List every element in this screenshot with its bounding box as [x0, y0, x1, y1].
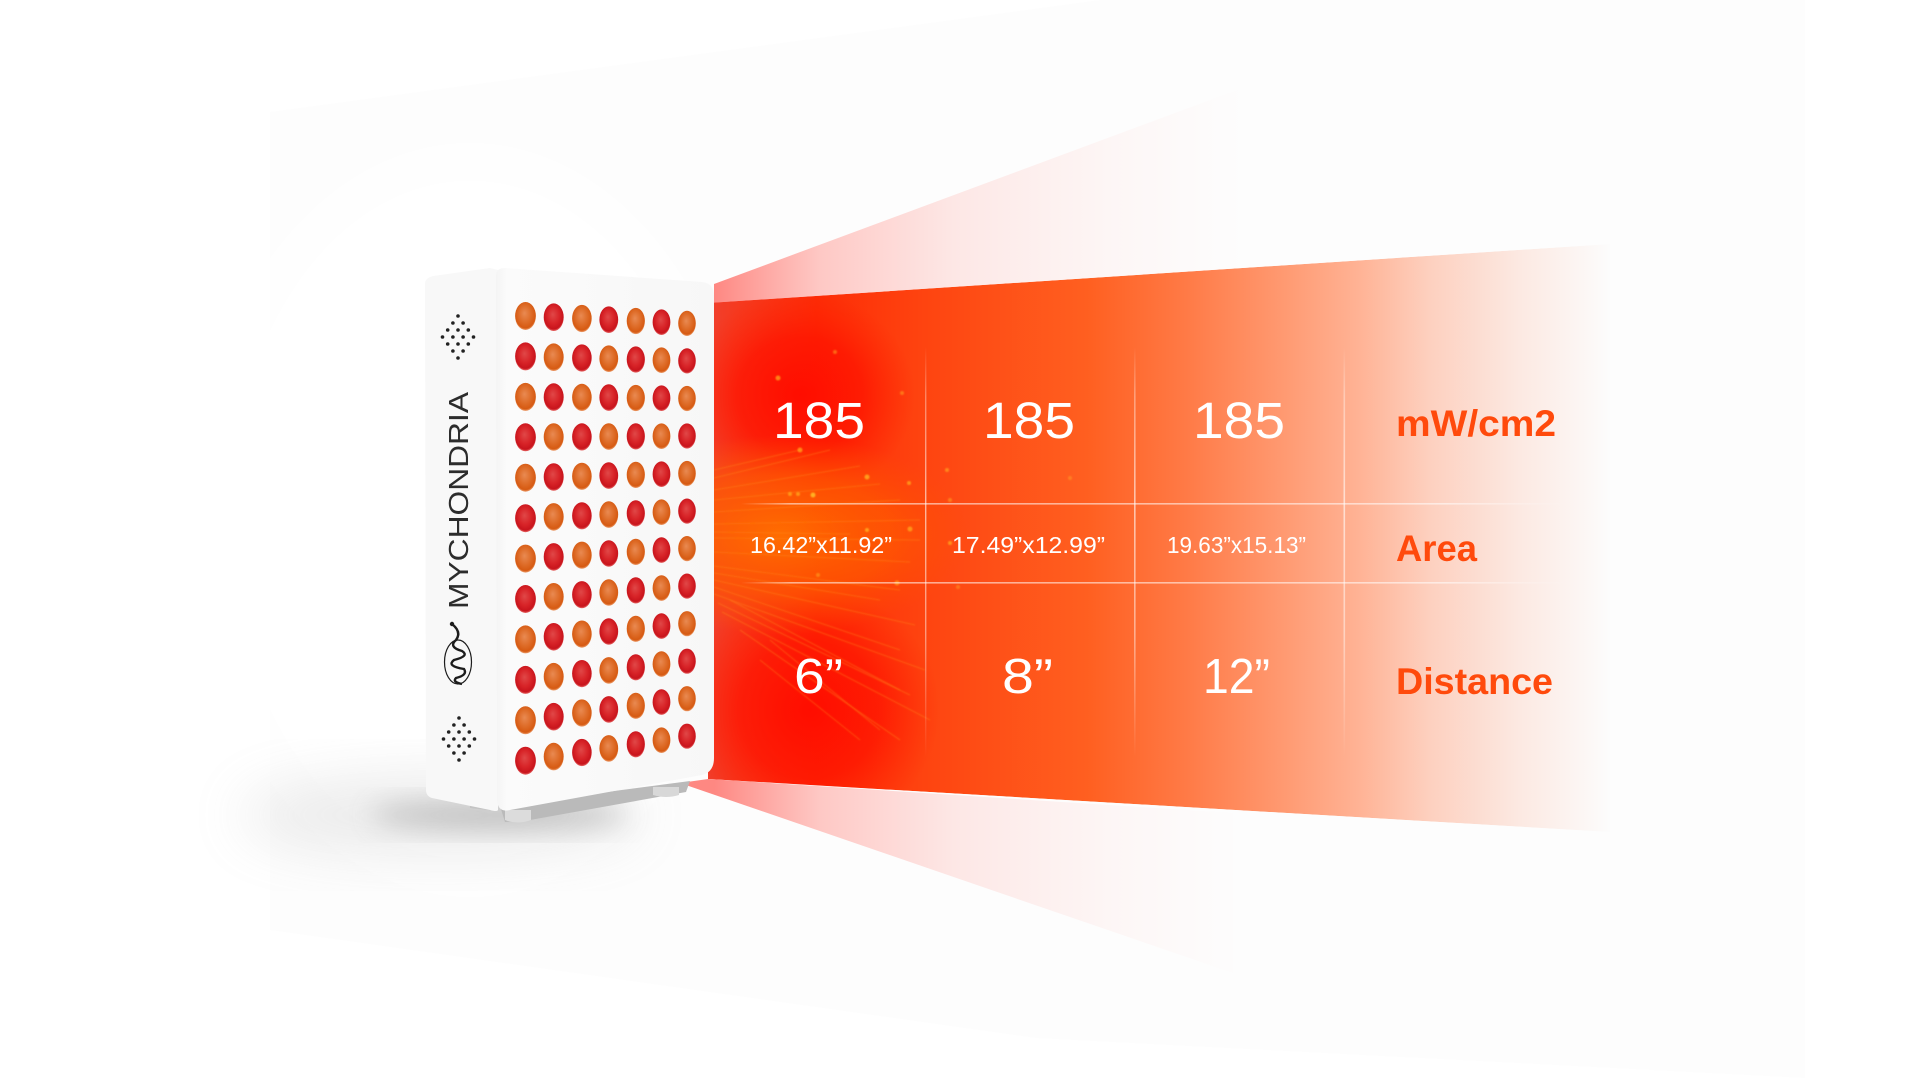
row: irradiance values: 185 — [983, 392, 1075, 449]
row labels: Distance — [1396, 661, 1553, 702]
device: red light therapy panel — [425, 268, 714, 822]
row labels: Area — [1396, 528, 1477, 569]
device side face — [425, 268, 498, 811]
white halo behind device — [210, 160, 730, 880]
sparkles — [776, 350, 1072, 589]
table grid lines — [741, 347, 1570, 757]
row: area values: 17.49”x12.99” — [952, 532, 1105, 558]
row: irradiance values — [773, 392, 1285, 449]
row: distance values: 6” — [794, 650, 843, 704]
device front face — [496, 268, 714, 811]
row labels: mW/cm2 — [1396, 403, 1556, 444]
row: distance values: 12” — [1203, 650, 1270, 704]
LED array — [515, 302, 696, 775]
row: distance values — [794, 650, 1270, 704]
speaker grille top — [441, 314, 475, 360]
faint background panel — [270, 0, 1805, 1078]
main light beam — [708, 246, 1586, 830]
row: area values: 19.63”x15.13” — [1167, 532, 1306, 558]
device shadow — [240, 777, 640, 853]
row: distance values: 8” — [1002, 650, 1053, 704]
speaker grille bottom — [442, 716, 476, 762]
row labels — [1396, 403, 1556, 702]
brand logo — [444, 622, 472, 684]
upper light flare — [714, 87, 1245, 303]
brand name: MYCHONDRIA — [443, 392, 474, 609]
lower light flare — [680, 779, 1233, 973]
row: area values: 16.42”x11.92” — [750, 532, 892, 558]
device feet and base — [470, 781, 690, 822]
row: irradiance values: 185 — [773, 392, 865, 449]
row: area values — [750, 532, 1306, 558]
row: irradiance values: 185 — [1193, 392, 1285, 449]
infographic canvas — [262, 129, 1592, 938]
